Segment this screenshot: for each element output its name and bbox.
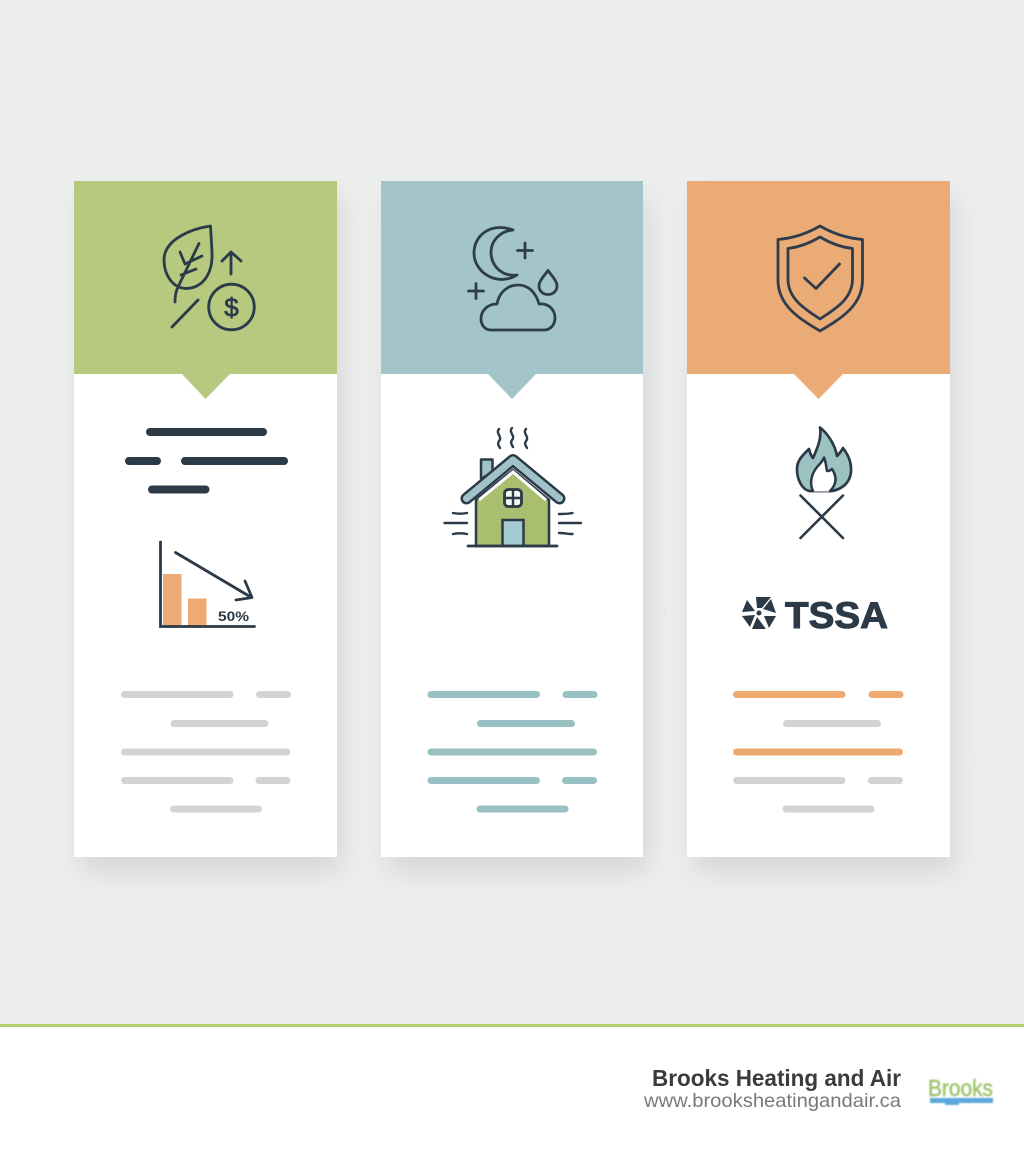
footer [0, 1024, 1024, 1154]
header: green with pointer [74, 181, 337, 399]
website url: www.brooksheatingandair.ca [643, 1090, 901, 1112]
icon: house with smoke and airflow lines [444, 428, 581, 546]
chart: bars falling 50%: 50% [218, 608, 250, 624]
panel: comfort [381, 181, 649, 873]
body text placeholder bars [121, 691, 291, 812]
logo mark: aperture wheel [742, 597, 776, 629]
header: orange with pointer [687, 181, 950, 399]
headline text placeholder bars [125, 428, 288, 494]
body text placeholder bars [428, 691, 598, 812]
icon: shield with check [778, 226, 862, 331]
icon: moon, cloud and droplet [468, 228, 557, 330]
logo: Brooks: Brooks [928, 1075, 993, 1101]
icon: flame over cross [797, 428, 851, 538]
header: teal with pointer [381, 181, 643, 399]
company name: Brooks Heating and Air [652, 1065, 901, 1091]
chart: bars falling 50% [160, 542, 254, 626]
icon: leaf, arrow and dollar coin [164, 226, 254, 330]
dollar sign: $ [224, 292, 239, 322]
body text placeholder bars [733, 691, 904, 812]
logo: TSSA [742, 595, 888, 636]
panel: energy savings [74, 181, 343, 873]
logo: TSSA: TSSA [785, 595, 888, 636]
panel: safety [687, 181, 956, 873]
